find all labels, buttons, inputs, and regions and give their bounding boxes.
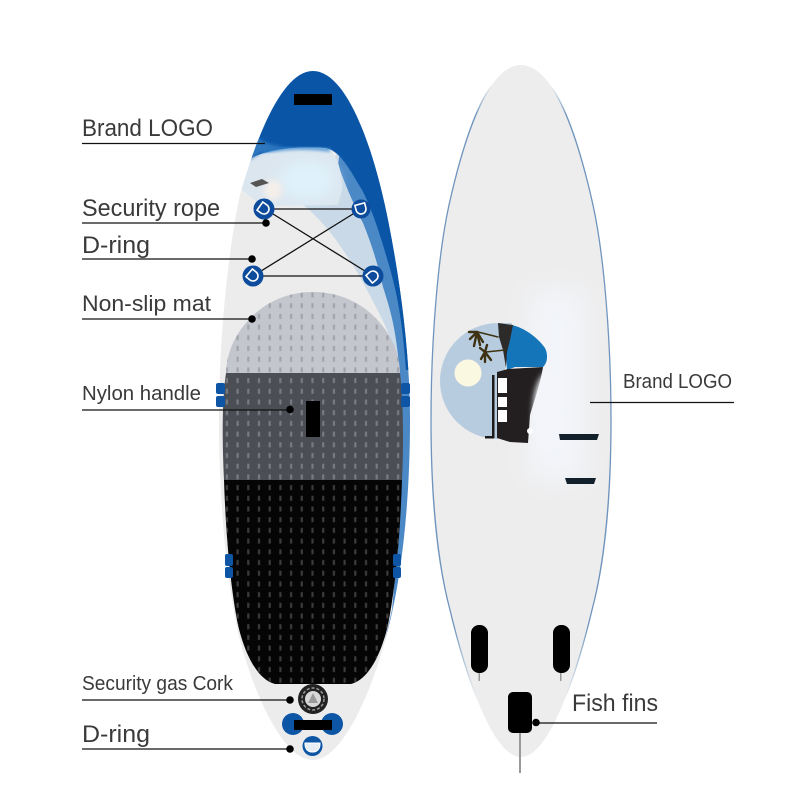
side handles: [216, 383, 410, 578]
non-slip mat: [222, 292, 403, 684]
label: Nylon handle: Nylon handle: [82, 383, 201, 405]
label: D-ring: [82, 232, 256, 263]
label: D-ring tail: D-ring: [82, 721, 150, 748]
board body: [431, 65, 611, 757]
air valve: [298, 684, 328, 714]
label: Fish fins: Fish fins: [572, 690, 658, 717]
tail D-ring: [302, 736, 322, 756]
label: Security rope: [82, 195, 270, 227]
bottom slots: [559, 434, 599, 440]
label: Nylon handle: [82, 383, 294, 413]
sail: [506, 325, 547, 370]
blue nose graphic: [242, 71, 410, 648]
boat hull: [497, 367, 543, 443]
brand logo artwork: [440, 323, 565, 452]
label: Security gas Cork: [82, 673, 294, 704]
label: Brand LOGO: Brand LOGO: [82, 115, 213, 142]
paddle board: bottom view: [431, 65, 611, 773]
moon: [454, 360, 482, 386]
glare mark: [250, 179, 269, 187]
logo fade: [533, 372, 565, 452]
label: Fish fins: [532, 690, 658, 726]
tail carry handle: [282, 713, 343, 735]
logo circle: [440, 323, 498, 439]
board body: [219, 71, 410, 760]
label: Security rope: Security rope: [82, 195, 220, 222]
label: Security gas Cork: Security gas Cork: [82, 673, 234, 695]
label: Non-slip mat: Non-slip mat: [82, 291, 211, 316]
nylon handle: [306, 401, 320, 437]
label: D-ring: D-ring: [82, 232, 150, 259]
security ropes: [253, 209, 373, 276]
top carry handle: [294, 94, 332, 105]
palm trees: [469, 332, 505, 362]
paddle board: top view: [215, 60, 420, 760]
D-rings with rope: [242, 198, 384, 286]
label: Brand LOGO right: Brand LOGO: [623, 371, 732, 393]
side fins: [471, 625, 570, 681]
label: D-ring tail: [82, 721, 294, 753]
center fin: [508, 692, 532, 773]
pale patch: [535, 296, 580, 474]
label: Non-slip mat: [82, 291, 256, 323]
